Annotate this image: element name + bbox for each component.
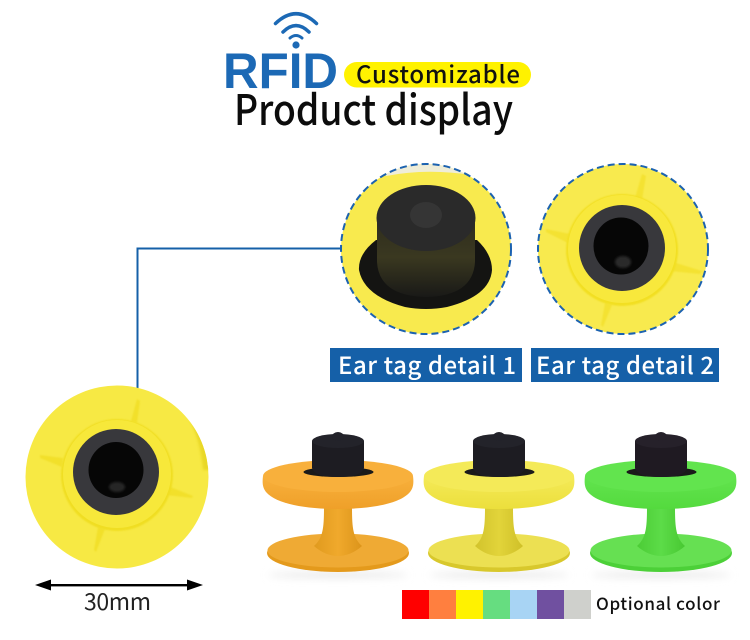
raised ring	[566, 194, 678, 306]
connector line	[138, 248, 341, 389]
green tag	[585, 432, 736, 578]
bottom disc	[267, 534, 409, 572]
black cap	[473, 441, 525, 477]
hole	[626, 467, 696, 477]
stem	[637, 507, 685, 556]
dimension arrow	[35, 580, 203, 590]
hole	[464, 467, 534, 477]
cap body	[377, 222, 475, 294]
label: detail 1: Ear tag detail 1	[338, 346, 516, 381]
dark grommet	[579, 205, 665, 291]
customizable badge: Customizable	[356, 55, 520, 90]
orange tag	[263, 432, 413, 578]
black cap	[312, 441, 364, 477]
cap nub	[410, 202, 442, 228]
RFID logotype: RFID	[223, 43, 338, 99]
black washer	[359, 240, 492, 309]
hole	[304, 467, 374, 477]
optional colour label: Optional color	[596, 590, 720, 615]
raised ring	[61, 419, 173, 531]
detail 2 circle	[538, 164, 708, 334]
dark grommet	[73, 429, 159, 515]
upper disc	[585, 476, 736, 509]
upper disc	[424, 476, 574, 509]
icon: RFID wireless signal	[276, 14, 316, 49]
cap top	[376, 185, 476, 251]
centre hole	[594, 218, 648, 274]
main yellow ear tag	[26, 386, 210, 568]
detail 1 circle	[340, 160, 512, 335]
ring ridges	[40, 399, 193, 552]
dimension label: 30mm	[84, 583, 151, 617]
header	[223, 14, 531, 138]
ring ridges	[546, 174, 702, 327]
bottom disc	[590, 534, 732, 572]
centre hole	[88, 442, 144, 498]
label: detail 2: Ear tag detail 2	[536, 346, 714, 381]
colour swatches	[402, 590, 591, 619]
stem	[314, 507, 362, 556]
title: Product display	[234, 77, 513, 138]
upper disc	[263, 476, 413, 509]
stem	[475, 507, 523, 556]
black cap	[635, 441, 687, 477]
bottom disc	[428, 534, 570, 572]
yellow tag	[424, 432, 574, 578]
